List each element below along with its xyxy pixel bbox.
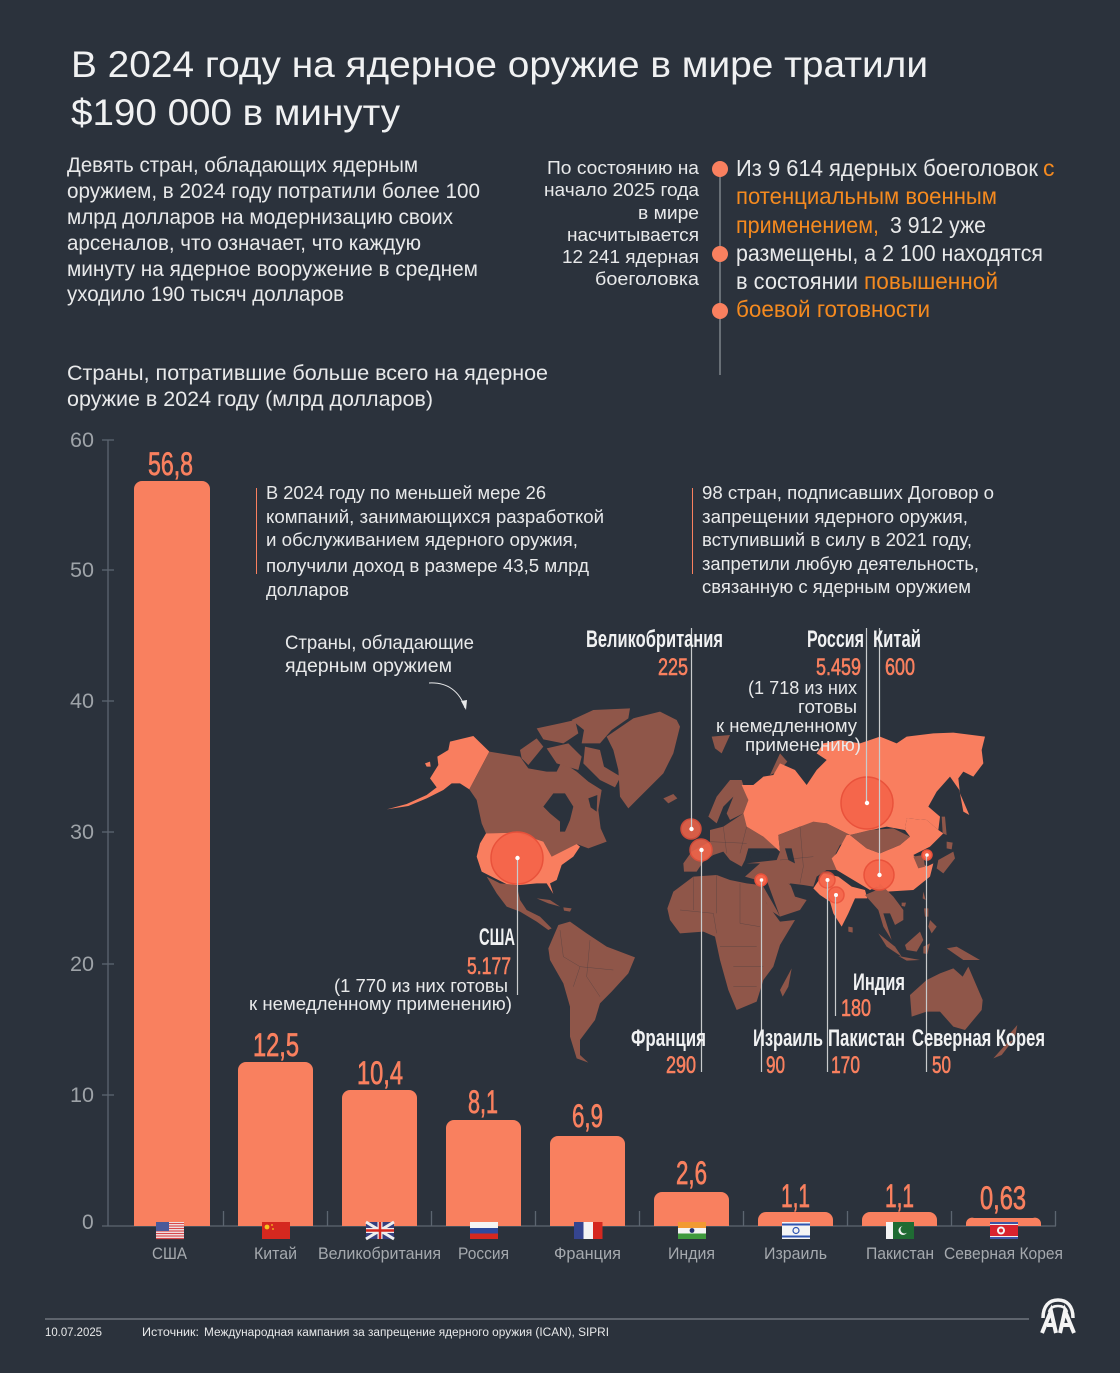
map label: Russia [716,626,864,755]
intro text: млрд долларов на модернизацию своих [67,206,453,229]
bar values: 10,4 [357,1055,403,1091]
bar values: 12,5 [253,1027,299,1063]
map label: North Korea [912,1025,1045,1079]
country labels: Израиль [764,1244,827,1263]
note: companies: долларов [266,579,349,600]
map label: India [841,969,905,1022]
intro text: минуту на ядерное вооружение в среднем [67,258,478,281]
bar values: 1,1 [885,1178,914,1214]
intro text: Девять стран, обладающих ядерным [67,154,418,177]
title [71,44,928,133]
map label: North Korea: 50 [932,1052,951,1079]
map label: France: Франция [631,1025,706,1052]
arrow head [461,700,467,710]
note: companies: получили доход в размере 43,5 млрд [266,555,589,576]
flag: China [262,1222,290,1239]
warheads total text: в мире [638,202,699,223]
chart axis: 20 [70,953,94,976]
title: В 2024 году на ядерное оружие в мире тратили [71,44,928,85]
note: treaty: запретили любую деятельность, [702,553,979,574]
flag: North Korea [990,1222,1018,1239]
country labels: Россия [458,1244,509,1263]
chart heading [67,362,548,411]
bar values: 56,8 [148,446,193,482]
map: North America [387,708,680,894]
flag: Israel [782,1222,810,1239]
map label: France: 290 [666,1052,696,1079]
chart axis: 0 [82,1211,94,1234]
footer date and source [45,1327,609,1339]
map label: nuclear countries [285,633,474,677]
map label: China [873,626,921,681]
flag: Russia [470,1222,498,1239]
warheads total text: боеголовка [595,268,700,289]
country labels [152,1244,1063,1263]
chart axis: 60 [70,429,94,452]
country labels: Пакистан [866,1244,934,1263]
warheads total text: 12 241 ядерная [562,246,699,267]
map: Latin America and Africa [487,875,795,1063]
intro text: оружием, в 2024 году потратили более 100 [67,180,480,203]
warheads total text: начало 2025 года [544,179,700,200]
warheads detail text: повышенной [864,268,998,294]
world map [387,708,1017,1063]
map label: Israel: Израиль [753,1025,823,1052]
warheads detail text: применением, [736,212,879,238]
map label: Russia: 5.459 [816,654,861,681]
map label: India: Индия [853,969,905,996]
flag: France [574,1222,602,1239]
map label: Pakistan: 170 [831,1052,860,1079]
icon: AA logo [1042,1300,1074,1333]
map label: North Korea: Северная Корея [912,1025,1045,1052]
warheads detail text: с [1043,155,1054,181]
bar values: 8,1 [468,1084,498,1120]
timeline with dots [712,161,728,375]
map label: Russia: к немедленному [716,716,857,736]
map label: UK: 225 [658,654,688,681]
bar values: 1,1 [781,1178,810,1214]
warheads total text [544,157,700,289]
warheads detail text [736,155,1054,322]
footer date and source: 10.07.2025 [45,1327,102,1339]
map label: Russia: применению) [745,735,861,755]
bar chart [134,481,1041,1226]
country labels: Франция [554,1244,621,1263]
map label: Russia: готовы [798,697,857,717]
map label: nuclear countries: Страны, обладающие [285,633,474,654]
footer date and source: Международная кампания за запрещение ядерного оружия (ICAN), SIPRI [204,1327,609,1339]
bar values: 0,63 [980,1180,1026,1216]
intro text: арсеналов, что означает, что каждую [67,232,421,255]
note: treaty: 98 стран, подписавших Договор о [702,482,994,503]
bar values: 2,6 [676,1155,707,1191]
map label: India: 180 [841,995,871,1022]
country labels: Великобритания [318,1244,441,1263]
note: treaty: запрещении ядерного оружия, [702,506,968,527]
intro text: уходило 190 тысяч долларов [67,283,344,306]
map label: USA [249,924,515,1014]
country labels: Индия [668,1244,715,1263]
map label: Pakistan [828,1025,905,1079]
flag: USA [156,1222,184,1239]
map label: Pakistan: Пакистан [828,1025,905,1052]
footer date and source: Источник: [142,1327,199,1339]
warheads detail text: 3 912 уже [890,212,986,238]
map label: Russia: (1 718 из них [748,678,857,698]
warheads detail text: боевой готовности [736,296,930,322]
map label: China: 600 [885,654,915,681]
note: treaty: связанную с ядерным оружием [702,576,971,597]
bar values [148,446,1026,1216]
intro text [67,154,480,306]
chart axis [70,429,1056,1234]
warheads total text: насчитывается [567,224,699,245]
country labels: Китай [254,1244,297,1263]
map: Eurasia [683,733,985,917]
flag: India [678,1222,706,1239]
title: $190 000 в минуту [71,92,401,133]
warheads total text: По состоянию на [547,157,700,178]
warheads detail text: размещены, а 2 100 находятся [736,240,1043,266]
map label: UK [586,626,723,681]
map label: Russia: Россия [807,626,864,653]
map label: France [631,1025,706,1079]
chart axis: 10 [70,1084,94,1107]
note: companies: В 2024 году по меньшей мере 26 [266,482,546,503]
note: companies: и обслуживанием ядерного оружия, [266,529,578,550]
warheads detail text: в состоянии [736,268,858,294]
country labels: Северная Корея [944,1244,1063,1263]
flag: Pakistan [886,1222,914,1239]
flag: UK [366,1222,394,1239]
map label: UK: Великобритания [586,626,723,653]
chart axis: 50 [70,559,94,582]
warheads detail text: Из 9 614 ядерных боеголовок [736,155,1039,181]
note: treaty [692,482,994,597]
map label: Israel: 90 [766,1052,785,1079]
chart axis: 30 [70,821,94,844]
chart heading: оружие в 2024 году (млрд долларов) [67,388,433,411]
map label: USA: к немедленному применению) [249,994,512,1014]
map label: China: Китай [873,626,921,653]
note: companies: компаний, занимающихся разработкой [266,506,604,527]
map label: USA: США [479,924,515,951]
warheads detail text: потенциальным военным [736,183,997,209]
chart heading: Страны, потратившие больше всего на ядерное [67,362,548,385]
map: South Asia and Oceania [813,873,1017,1058]
country labels: США [152,1244,188,1263]
map label: USA: (1 770 из них готовы [334,976,508,996]
note: companies [256,482,604,600]
chart axis: 40 [70,690,94,713]
map label: nuclear countries: ядерным оружием [285,656,452,677]
map label: USA: 5.177 [467,953,511,980]
arrow [429,683,465,708]
map label: Israel [753,1025,823,1079]
note: treaty: вступивший в силу в 2021 году, [702,529,972,550]
nuclear state markers [491,628,932,1072]
bar values: 6,9 [572,1098,603,1134]
